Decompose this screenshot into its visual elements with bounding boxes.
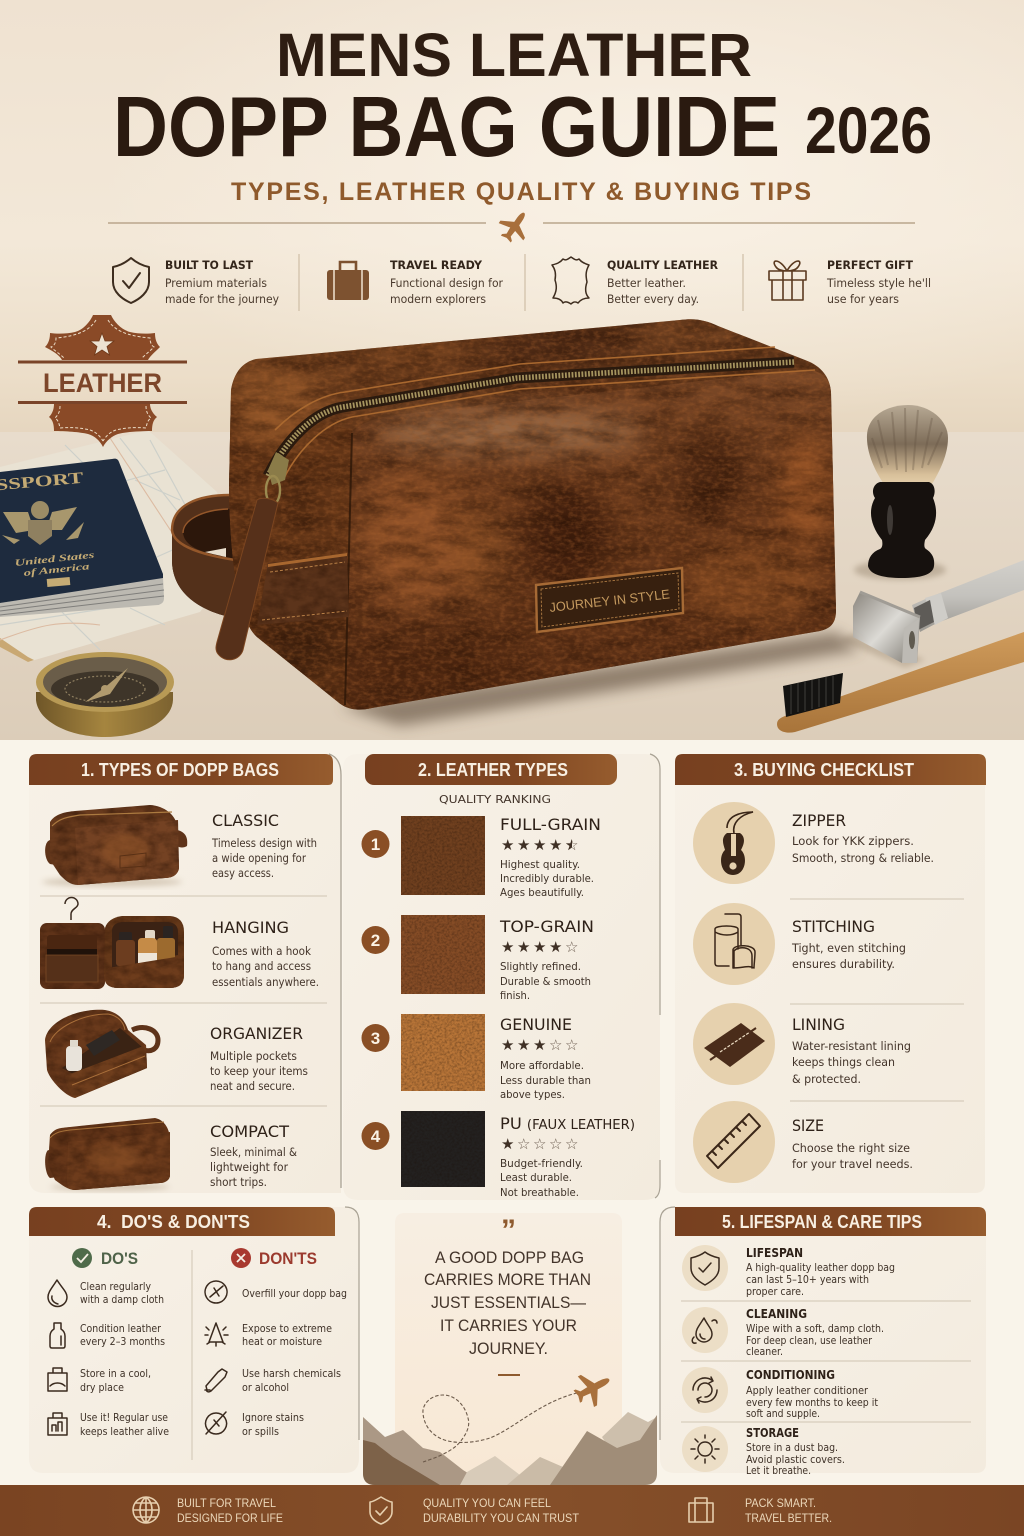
rank 4: pu faux leather: ☆☆☆☆ [517,1135,578,1153]
quote text [424,1248,591,1358]
rank 2: top-grain: 2 [371,931,380,950]
rank 2: top-grain: TOP-GRAIN [499,917,594,936]
don'ts column: DON'TS [259,1249,317,1268]
feature: perfect gift: use for years [827,292,899,306]
tip: conditioning: Apply leather conditioner [746,1385,869,1397]
don't: chemicals: Use harsh chemicals [242,1368,341,1380]
hero background [0,0,1024,740]
mountains [363,1412,657,1485]
rank 3: genuine: GENUINE [500,1015,572,1034]
do: clean [48,1280,164,1306]
footer banner [0,1485,1024,1536]
tip: storage: Let it breathe. [746,1465,811,1477]
icon: lining [704,1023,765,1067]
heading [675,754,986,785]
text: compact [210,1122,297,1189]
do's column: DO'S [101,1249,138,1268]
panel 1: types of dopp bags [29,754,341,1193]
quote text: CARRIES MORE THAN [424,1270,591,1289]
footer: built for travel: DESIGNED FOR LIFE [177,1511,283,1525]
eagle emblem [2,501,84,545]
text: organizer: to keep your items [210,1064,308,1078]
bag handle [172,495,350,625]
checklist: size [693,1101,913,1183]
quote text: JOURNEY. [469,1339,548,1358]
feature: quality leather: Better every day. [607,292,699,306]
text: classic: a wide opening for [212,851,306,865]
text: hanging: Comes with a hook [212,944,311,958]
feature: travel ready: modern explorers [390,292,486,306]
text: hanging: HANGING [212,918,289,937]
do: use it: keeps leather alive [80,1426,169,1438]
rank 1: full-grain: FULL-GRAIN [500,815,601,834]
checklist: zipper: Look for YKK zippers. [792,834,914,848]
checklist: size: Choose the right size [792,1141,910,1155]
bag: compact [45,1118,170,1191]
checklist: lining: keeps things clean [792,1055,895,1069]
bag: hanging [40,898,184,989]
panel 3: buying checklist [675,754,986,1193]
don't: heat [205,1323,332,1348]
checklist: stitching: ensures durability. [792,957,895,971]
tip: cleaning: For deep clean, use leather [746,1335,873,1347]
tip: lifespan [682,1245,895,1298]
leather badge [18,315,187,447]
rank 4: pu faux leather: 4 [371,1127,381,1146]
leather patch [536,568,683,632]
text: organizer: Multiple pockets [210,1049,297,1063]
subtitle: TYPES, LEATHER QUALITY & BUYING TIPS [231,178,811,206]
don't: heat: heat or moisture [242,1336,322,1348]
rank 4: pu faux leather: Not breathable. [500,1187,579,1199]
text: compact: short trips. [210,1175,267,1189]
tip: cleaning [682,1307,884,1358]
compass [36,652,174,737]
title: MENS LEATHER [276,21,752,89]
don't: stains: or spills [242,1426,279,1438]
title [113,21,932,175]
heading [365,754,617,785]
footer: built for travel: BUILT FOR TRAVEL [177,1496,276,1510]
footer: quality: DURABILITY YOU CAN TRUST [423,1511,580,1525]
do: store: dry place [80,1382,124,1394]
don't: overfill [205,1281,347,1303]
heading: 4. DO'S & DON'TS [97,1212,250,1232]
heading: 5. LIFESPAN & CARE TIPS [722,1212,922,1232]
feature: perfect gift: Timeless style he'll [826,276,931,290]
text: classic: easy access. [212,866,274,880]
leather badge: LEATHER [43,368,162,398]
footer: pack smart [689,1496,832,1525]
text: compact: COMPACT [210,1122,289,1141]
rank 3: genuine: ☆☆ [549,1036,578,1054]
rank 4: pu faux leather: PU (FAUX LEATHER) [500,1114,635,1133]
checklist: zipper: ZIPPER [792,811,846,830]
do: store [48,1368,151,1394]
tip: storage [682,1426,845,1477]
rank 3: genuine: ★★★ [501,1036,546,1054]
rank 1: full-grain: ★ [565,836,578,854]
map behind passport [0,430,240,662]
title: DOPP BAG GUIDE [113,80,780,175]
quote text: A GOOD DOPP BAG [435,1248,584,1267]
checklist: zipper [693,802,934,884]
rank 3: genuine: Less durable than [500,1075,591,1087]
passport [0,459,164,617]
don't: stains: Ignore stains [242,1412,304,1424]
don't: stains [206,1412,304,1438]
text: compact: lightweight for [210,1160,288,1174]
footer: quality: QUALITY YOU CAN FEEL [423,1496,551,1510]
feature: quality leather [552,257,718,306]
text: classic [211,811,317,880]
rank 1: full-grain [362,815,601,899]
feature: quality leather: Better leather. [607,276,686,290]
plane [569,1364,617,1412]
rank 2: top-grain: ☆ [565,938,578,956]
rank 3: genuine: above types. [500,1089,565,1101]
text: organizer [210,1024,308,1093]
checklist: lining: & protected. [792,1072,861,1086]
don't: overfill: Overfill your dopp bag [242,1288,347,1300]
text: classic: Timeless design with [211,836,317,850]
shaving brush [854,405,948,580]
quote mark: ” [501,1214,516,1247]
rank 2: top-grain: Slightly refined. [500,961,581,973]
checklist: stitching: Tight, even stitching [791,941,906,955]
do: condition [50,1323,165,1348]
bag body [220,310,845,720]
rank 2: top-grain: ★★★★ [501,938,562,956]
checklist: zipper: Smooth, strong & reliable. [792,851,934,865]
feature row [113,254,931,311]
panel 4: do's and don'ts [29,1207,359,1473]
rank 1: full-grain: ☆ [565,836,578,854]
text: organizer: neat and secure. [210,1079,295,1093]
feature: quality leather: QUALITY LEATHER [607,258,718,272]
feature: built to last: BUILT TO LAST [165,258,253,272]
bag: classic [42,805,187,887]
tip: conditioning: every few months to keep it [746,1397,878,1409]
text: hanging: to hang and access [212,959,311,973]
bag: organizer [45,1010,158,1098]
lower background [0,740,1024,1486]
heading [29,754,333,785]
heading [29,1207,335,1236]
do's column [48,1248,169,1438]
don't: heat: Expose to extreme [242,1323,332,1335]
panel 5: lifespan and care tips [660,1207,986,1477]
tip: conditioning: CONDITIONING [746,1368,835,1382]
feature: travel ready: Functional design for [390,276,503,290]
rank 1: full-grain: 1 [371,835,380,854]
footer: built for travel [133,1496,283,1525]
feature: perfect gift: PERFECT GIFT [827,258,913,272]
do: clean: Clean regularly [80,1281,151,1293]
leather patch: JOURNEY IN STYLE [549,586,671,615]
heading [675,1207,986,1236]
quote text: JUST ESSENTIALS— [431,1293,586,1312]
rank 1: full-grain: Ages beautifully. [500,887,584,899]
razor [840,560,1024,668]
handle strap [257,553,349,625]
do: clean: with a damp cloth [80,1294,164,1306]
tip: cleaning: Wipe with a soft, damp cloth. [746,1323,884,1335]
passport: United States [14,551,95,569]
divider with plane [108,204,915,248]
quality ranking label: QUALITY RANKING [439,793,551,806]
do: store: Store in a cool, [80,1368,151,1380]
checklist: stitching: STITCHING [792,917,875,936]
do: condition: every 2–3 months [80,1336,165,1348]
text: hanging: essentials anywhere. [212,975,319,989]
tip: lifespan: A high-quality leather dopp bag [746,1262,895,1274]
footer: quality [370,1496,580,1525]
feature: built to last: Premium materials [165,276,267,290]
rank 2: top-grain: Durable & smooth [500,976,591,988]
checklist: lining: Water-resistant lining [792,1039,911,1053]
footer: pack smart: PACK SMART. [745,1496,816,1510]
quote text: IT CARRIES YOUR [440,1316,577,1335]
text: hanging [212,918,319,989]
rank 4: pu faux leather: Least durable. [500,1172,572,1184]
rank 4: pu faux leather: ★ [501,1135,514,1153]
tip: lifespan: can last 5–10+ years with [746,1274,869,1286]
don't: chemicals: or alcohol [242,1382,289,1394]
checklist: size: SIZE [792,1116,824,1135]
tip: cleaning: cleaner. [746,1346,783,1358]
tip: conditioning: soft and supple. [746,1408,820,1420]
tip: lifespan: proper care. [746,1286,804,1298]
main bag [172,310,860,726]
text: organizer: ORGANIZER [210,1024,303,1043]
don'ts column [205,1248,347,1438]
heading: 2. LEATHER TYPES [418,760,568,780]
heading: 3. BUYING CHECKLIST [734,760,914,780]
rank 3: genuine: 3 [371,1029,380,1048]
rank 1: full-grain: Highest quality. [500,859,580,871]
feature: perfect gift [769,258,931,306]
do: use it [48,1412,169,1438]
text: compact: Sleek, minimal & [210,1145,297,1159]
toothbrush [777,632,1024,733]
bag zipper [268,347,815,476]
feature: travel ready: TRAVEL READY [390,258,483,272]
icon: ruler [707,1114,760,1168]
rank 2: top-grain: finish. [500,990,530,1002]
tip: storage: STORAGE [746,1426,799,1440]
feature: travel ready [327,258,503,306]
checklist: lining: LINING [792,1015,845,1034]
checklist: size: for your travel needs. [792,1157,913,1171]
rank 1: full-grain: ★★★★ [501,836,562,854]
checklist: lining [693,1003,911,1086]
do: use it: Use it! Regular use [80,1412,168,1424]
rank 4: pu faux leather [362,1111,635,1199]
heading: 1. TYPES OF DOPP BAGS [81,760,279,780]
quote panel [363,1213,657,1485]
panel 2: leather types [343,754,660,1200]
zipper pull [266,452,289,504]
rank 1: full-grain: Incredibly durable. [500,873,594,885]
icon: zipper pull [721,812,753,875]
title: 2026 [805,93,932,167]
tip: cleaning: CLEANING [746,1307,807,1321]
tip: conditioning [682,1367,878,1420]
feature: built to last [113,258,279,306]
checklist: stitching [693,903,906,985]
rank 4: pu faux leather: Budget-friendly. [500,1158,583,1170]
dashed flight path [423,1393,577,1462]
icon: thread and needle [715,914,755,968]
footer: pack smart: TRAVEL BETTER. [745,1511,832,1525]
tip: storage: Store in a dust bag. [746,1442,838,1454]
text: classic: CLASSIC [212,811,279,830]
feature: built to last: made for the journey [165,292,279,306]
do: condition: Condition leather [80,1323,162,1335]
zipper tab [216,498,278,660]
rank 2: top-grain [362,915,594,1002]
tip: storage: Avoid plastic covers. [746,1454,845,1466]
tip: lifespan: LIFESPAN [746,1246,803,1260]
passport: of America [23,562,90,579]
rank 3: genuine: More affordable. [500,1060,584,1072]
rank 3: genuine [362,1014,591,1101]
don't: chemicals [205,1368,341,1394]
